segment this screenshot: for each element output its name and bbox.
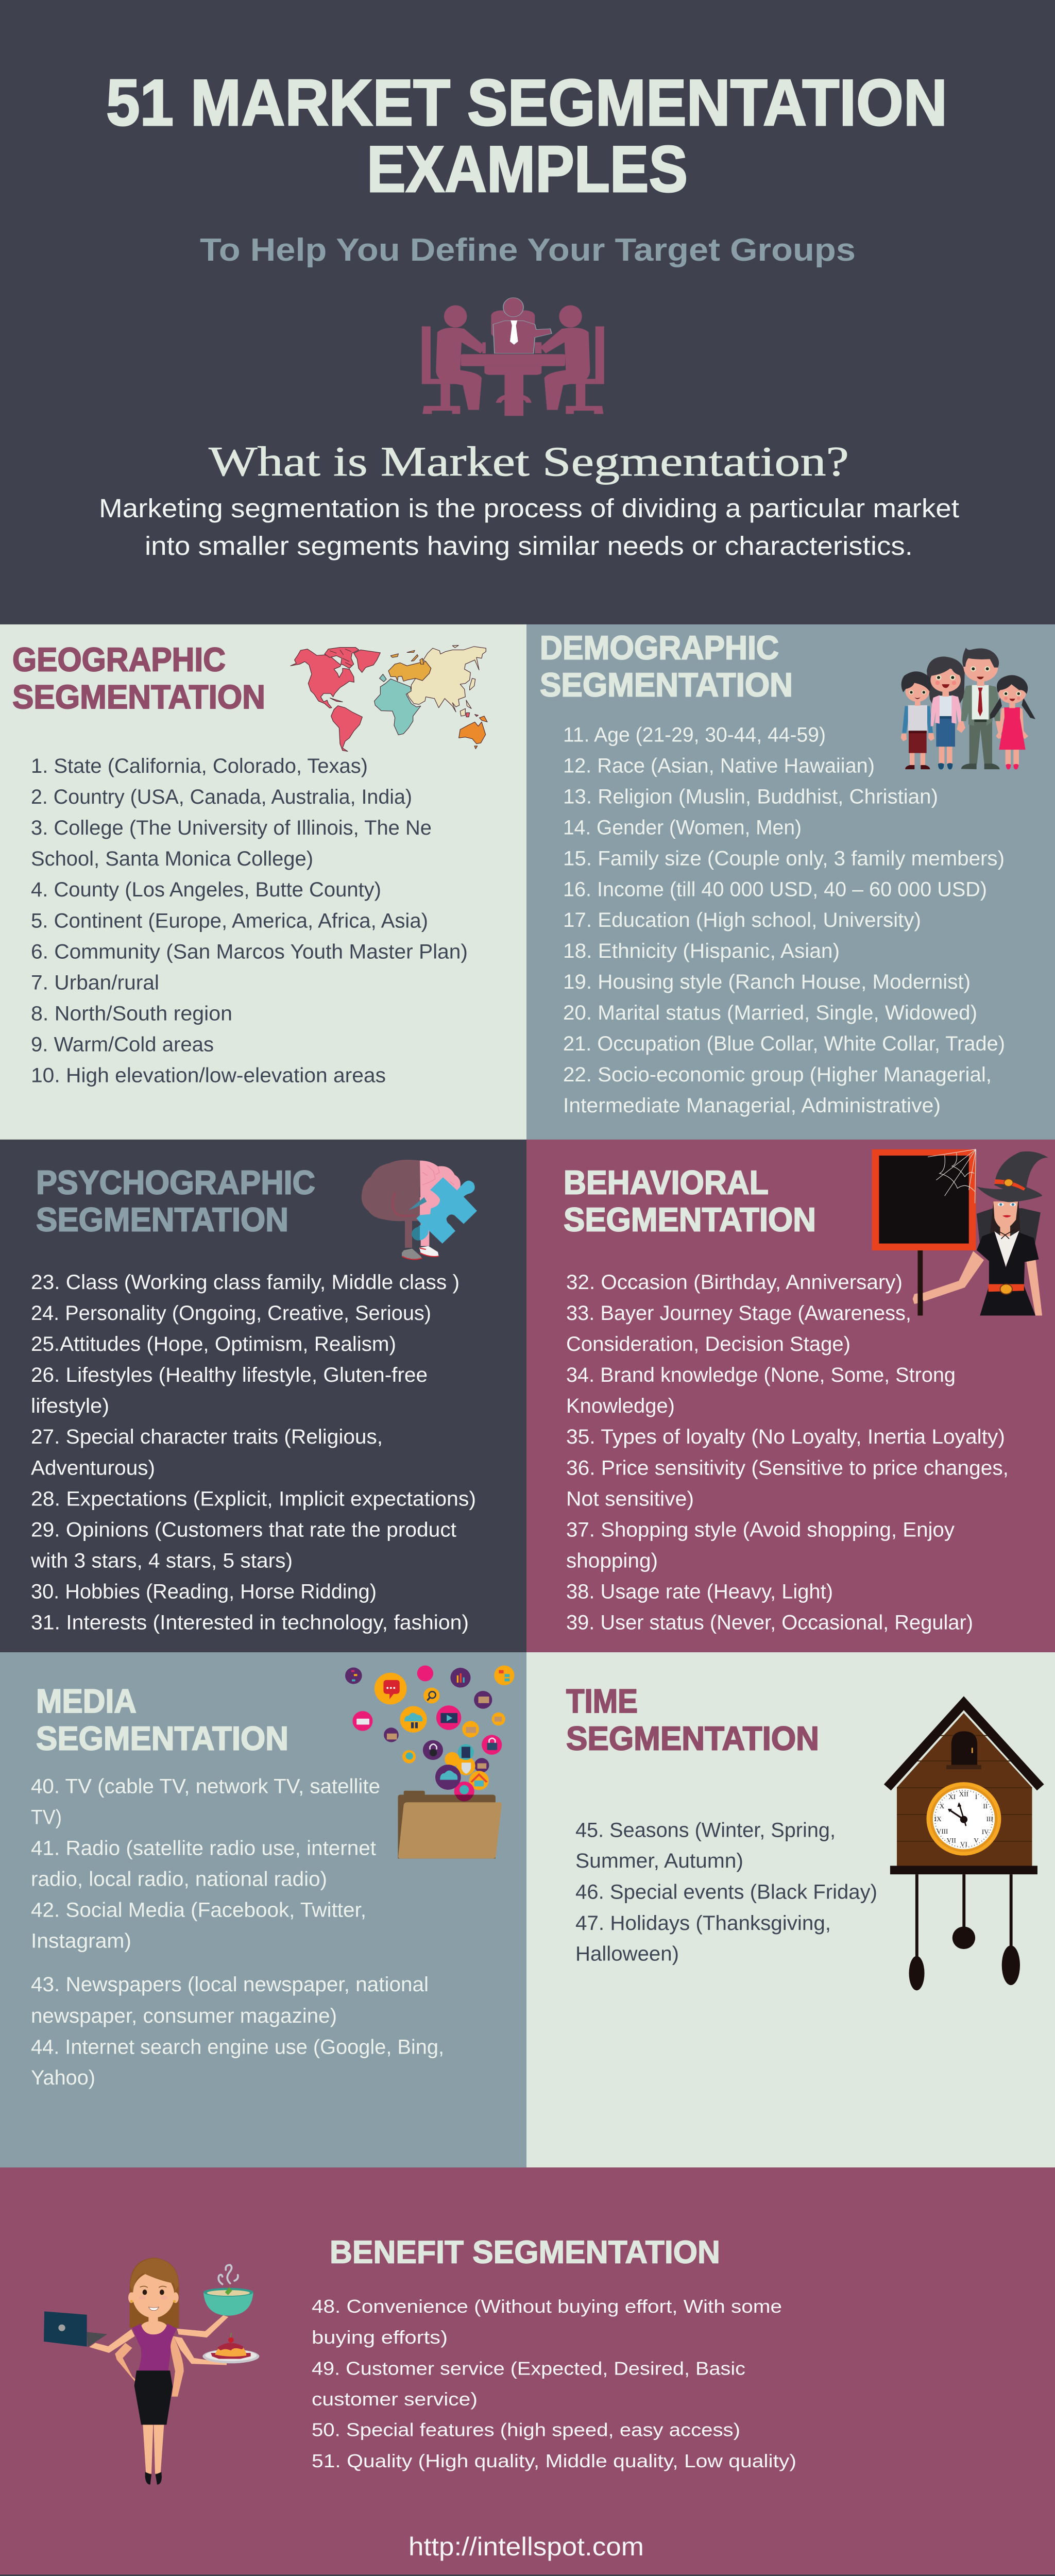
icon: family — [901, 648, 1035, 769]
list: demographic items: 18. Ethnicity (Hispanic, Asian) — [563, 939, 840, 962]
list: behavioral items: 32. Occasion (Birthday, Anniversary) — [566, 1270, 903, 1294]
icon: cuckoo clock: III — [986, 1815, 993, 1823]
list: psychographic items: 29. Opinions (Customers that rate the product — [31, 1518, 456, 1541]
list: media items: newspaper, consumer magazine) — [31, 2004, 337, 2027]
list: geographic items — [31, 754, 468, 1087]
list: behavioral items: shopping) — [566, 1549, 658, 1572]
list: demographic items: 21. Occupation (Blue Collar, White Collar, Trade) — [563, 1032, 1005, 1055]
list: psychographic items: Adventurous) — [31, 1456, 155, 1479]
icon: folder with media icons — [345, 1666, 514, 1858]
panel: benefit segmentation — [0, 2167, 1055, 2574]
list: media items: 44. Internet search engine use (Google, Bing, — [31, 2035, 444, 2058]
list: geographic items: 10. High elevation/low-elevation areas — [31, 1063, 386, 1087]
heading: demographic: SEGMENTATION — [540, 666, 793, 703]
list: geographic items: 4. County (Los Angeles, Butte County) — [31, 878, 381, 901]
heading: geographic — [12, 641, 265, 716]
list: demographic items: 13. Religion (Muslin, Buddhist, Christian) — [563, 785, 938, 808]
icon: cuckoo clock: II — [983, 1802, 988, 1810]
icon: cuckoo clock: I — [975, 1793, 977, 1801]
panel: demographic segmentation — [526, 624, 1055, 1140]
icon: brain with puzzle piece — [362, 1160, 477, 1260]
heading: demographic: DEMOGRAPHIC — [540, 629, 779, 666]
heading: geographic: GEOGRAPHIC — [12, 641, 226, 679]
title — [106, 67, 947, 206]
list: media items: Yahoo) — [31, 2065, 95, 2089]
list: geographic items: 5. Continent (Europe, America, Africa, Asia) — [31, 909, 428, 932]
list: demographic items: Intermediate Managerial, Administrative) — [563, 1093, 941, 1117]
list: behavioral items: Consideration, Decision Stage) — [566, 1332, 850, 1355]
heading: time: SEGMENTATION — [566, 1720, 819, 1757]
list: benefit items: 48. Convenience (Without buying effort, With some — [312, 2296, 782, 2317]
heading: psychographic: PSYCHOGRAPHIC — [36, 1164, 315, 1201]
list: psychographic items: 23. Class (Working class family, Middle class ) — [31, 1270, 460, 1294]
definition paragraph: Marketing segmentation is the process of dividing a particular market — [99, 493, 959, 523]
list: time items: Halloween) — [575, 1942, 679, 1965]
list: psychographic items: with 3 stars, 4 stars, 5 stars) — [30, 1549, 293, 1572]
list: media items: TV) — [31, 1805, 62, 1828]
list: behavioral items: 39. User status (Never, Occasional, Regular) — [566, 1611, 973, 1634]
list: behavioral items: Knowledge) — [566, 1394, 675, 1417]
list: geographic items: School, Santa Monica College) — [31, 847, 313, 870]
list: behavioral items: 34. Brand knowledge (None, Some, Strong — [566, 1363, 956, 1386]
list: behavioral items: 38. Usage rate (Heavy, Light) — [566, 1580, 833, 1603]
icon: cuckoo clock — [888, 1703, 1041, 1990]
list: behavioral items: 33. Bayer Journey Stage (Awareness, — [566, 1301, 911, 1325]
list: psychographic items: 30. Hobbies (Reading, Horse Ridding) — [31, 1580, 377, 1603]
list: demographic items: 12. Race (Asian, Native Hawaiian) — [563, 754, 875, 777]
list: behavioral items: 37. Shopping style (Avoid shopping, Enjoy — [566, 1518, 955, 1541]
list: psychographic items: lifestyle) — [31, 1394, 109, 1417]
list: demographic items — [563, 723, 1005, 1117]
list: media items: 43. Newspapers (local newspaper, national — [31, 1973, 429, 1996]
section heading: what is market segmentation: What is Market Segmentation? — [209, 438, 849, 485]
heading: psychographic: SEGMENTATION — [36, 1201, 288, 1238]
list: media items — [31, 1774, 444, 2089]
icon: cuckoo clock: IX — [934, 1815, 942, 1823]
icon: cuckoo clock: VII — [947, 1837, 956, 1844]
heading: psychographic — [36, 1164, 315, 1238]
icon: witch holding sign — [872, 1149, 1048, 1315]
list: psychographic items: 27. Special character traits (Religious, — [31, 1425, 383, 1448]
icon: multitasking woman — [44, 2258, 259, 2485]
panel: psychographic segmentation — [0, 1140, 526, 1652]
list: demographic items: 14. Gender (Women, Men) — [563, 816, 802, 839]
list: behavioral items: 35. Types of loyalty (No Loyalty, Inertia Loyalty) — [566, 1425, 1005, 1448]
panel: geographic segmentation — [0, 624, 526, 1140]
list: behavioral items: 36. Price sensitivity (Sensitive to price changes, — [566, 1456, 1009, 1479]
list: media items: Instagram) — [31, 1929, 131, 1952]
list: psychographic items: 24. Personality (Ongoing, Creative, Serious) — [31, 1301, 431, 1325]
heading: behavioral: SEGMENTATION — [564, 1201, 816, 1238]
list: demographic items: 11. Age (21-29, 30-44, 44-59) — [563, 723, 826, 746]
list: behavioral items: Not sensitive) — [566, 1487, 694, 1510]
list: psychographic items: 31. Interests (Interested in technology, fashion) — [31, 1611, 469, 1634]
heading: behavioral: BEHAVIORAL — [564, 1164, 769, 1201]
list: demographic items: 19. Housing style (Ranch House, Modernist) — [563, 970, 971, 993]
list: demographic items: 15. Family size (Couple only, 3 family members) — [563, 846, 1005, 870]
panel: media segmentation — [0, 1652, 526, 2167]
list: geographic items: 2. Country (USA, Canada, Australia, India) — [31, 785, 412, 808]
list: time items — [575, 1818, 877, 1965]
panel: behavioral segmentation — [526, 1140, 1055, 1652]
title: EXAMPLES — [367, 133, 688, 206]
definition paragraph — [99, 493, 959, 561]
list: psychographic items — [30, 1270, 476, 1634]
heading: media: MEDIA — [36, 1683, 137, 1720]
list: geographic items: 3. College (The University of Illinois, The Ne — [31, 816, 432, 839]
list: geographic items: 7. Urban/rural — [31, 971, 159, 994]
heading: behavioral — [564, 1164, 816, 1238]
list: benefit items: 49. Customer service (Expected, Desired, Basic — [312, 2358, 745, 2379]
list: benefit items: 51. Quality (High quality, Middle quality, Low quality) — [312, 2450, 796, 2471]
list: behavioral items — [566, 1270, 1009, 1634]
list: time items: 45. Seasons (Winter, Spring, — [575, 1818, 836, 1841]
title: 51 MARKET SEGMENTATION — [106, 67, 947, 140]
heading: geographic: SEGMENTATION — [12, 679, 265, 716]
list: demographic items: 16. Income (till 40 000 USD, 40 – 60 000 USD) — [563, 877, 987, 901]
heading: media: SEGMENTATION — [36, 1720, 288, 1757]
list: psychographic items: 28. Expectations (Explicit, Implicit expectations) — [31, 1487, 476, 1510]
icon: cuckoo clock: VIII — [937, 1827, 948, 1835]
list: geographic items: 6. Community (San Marcos Youth Master Plan) — [31, 940, 468, 963]
list: media items: radio, local radio, national radio) — [31, 1867, 327, 1891]
icon: cuckoo clock: VI — [960, 1840, 967, 1848]
list: demographic items: 17. Education (High school, University) — [563, 908, 921, 931]
icon: cuckoo clock: XI — [948, 1793, 956, 1801]
list: benefit items — [312, 2296, 796, 2471]
header panel — [99, 67, 959, 561]
list: time items: Summer, Autumn) — [575, 1849, 743, 1872]
heading: time: TIME — [566, 1683, 638, 1720]
panel: time segmentation — [526, 1652, 1055, 2167]
subtitle: To Help You Define Your Target Groups — [200, 232, 856, 268]
heading: benefit: BENEFIT SEGMENTATION — [330, 2234, 720, 2270]
heading: time — [566, 1683, 819, 1757]
icon: cuckoo clock: XII — [959, 1790, 968, 1798]
list: geographic items: 8. North/South region — [31, 1002, 232, 1025]
icon: business meeting — [422, 298, 604, 416]
list: media items: 42. Social Media (Facebook, Twitter, — [31, 1898, 366, 1922]
icon: world map — [291, 646, 487, 751]
list: geographic items: 1. State (California, Colorado, Texas) — [31, 754, 368, 777]
heading: media — [36, 1683, 288, 1757]
list: benefit items: buying efforts) — [312, 2327, 448, 2348]
list: time items: 46. Special events (Black Friday) — [575, 1880, 877, 1903]
list: psychographic items: 25.Attitudes (Hope, Optimism, Realism) — [31, 1332, 396, 1355]
source url: http://intellspot.com — [409, 2532, 644, 2561]
heading: demographic — [540, 629, 793, 703]
icon: cuckoo clock: X — [940, 1802, 945, 1810]
list: time items: 47. Holidays (Thanksgiving, — [575, 1911, 831, 1935]
list: media items: 41. Radio (satellite radio use, internet — [31, 1836, 376, 1859]
list: geographic items: 9. Warm/Cold areas — [31, 1032, 214, 1056]
list: media items: 40. TV (cable TV, network TV, satellite — [31, 1774, 380, 1798]
list: demographic items: 22. Socio-economic group (Higher Managerial, — [563, 1062, 992, 1086]
list: benefit items: customer service) — [312, 2388, 478, 2410]
definition paragraph: into smaller segments having similar needs or characteristics. — [145, 531, 913, 561]
icon: cuckoo clock: IV — [982, 1828, 989, 1836]
icon: cuckoo clock: V — [974, 1837, 979, 1844]
list: benefit items: 50. Special features (high speed, easy access) — [312, 2419, 740, 2440]
list: psychographic items: 26. Lifestyles (Healthy lifestyle, Gluten-free — [31, 1363, 428, 1386]
list: demographic items: 20. Marital status (Married, Single, Widowed) — [563, 1001, 977, 1024]
